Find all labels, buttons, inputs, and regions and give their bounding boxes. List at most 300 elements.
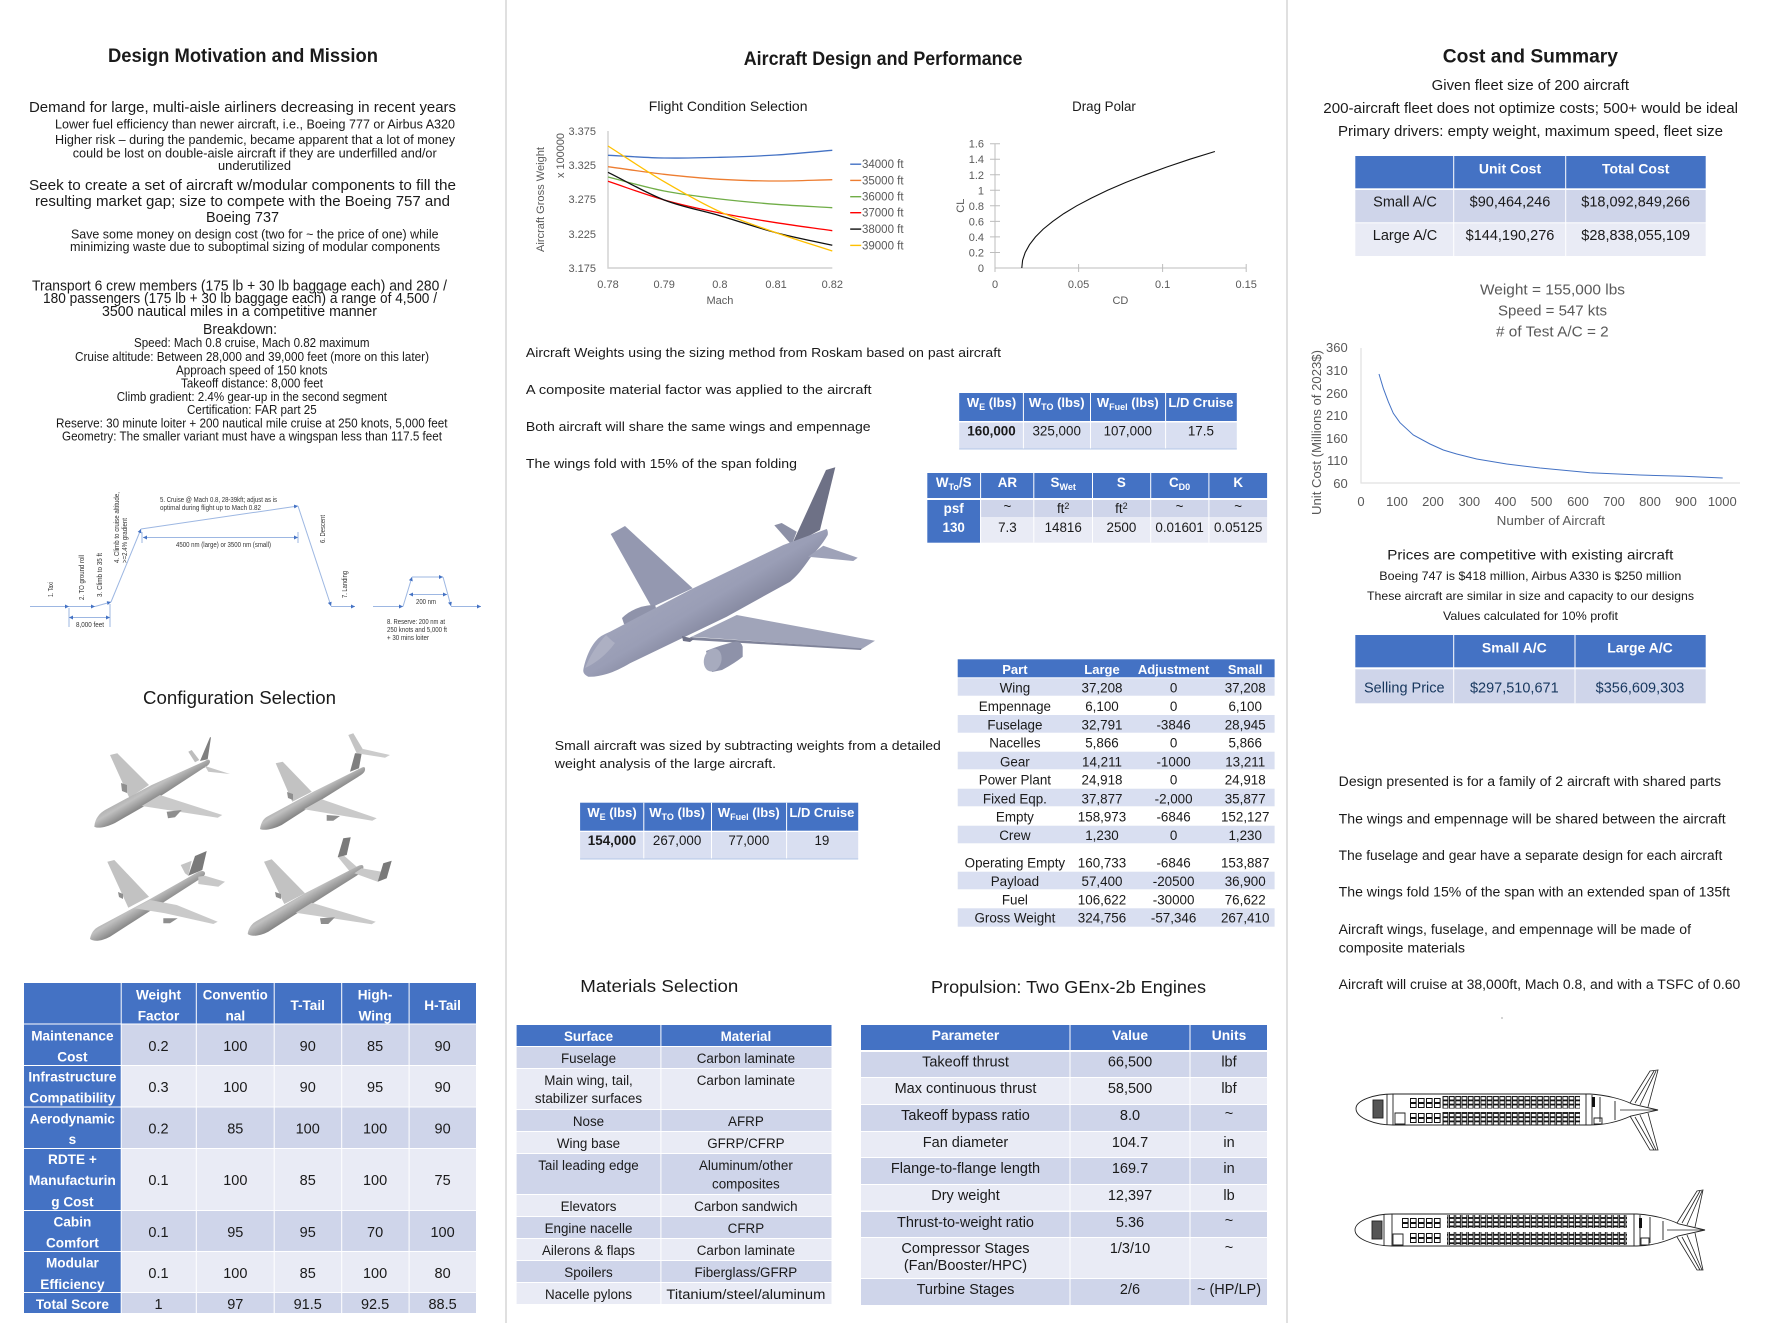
icon: large aircraft 3d model [583,467,875,677]
table: selling price: Selling Price [1364,680,1445,696]
table: unit and total cost: Small A/C [1373,195,1437,211]
chart: drag polar: 1.2 [969,170,984,182]
chart: mission profile diagram: 7. Landing [340,571,349,598]
table: engine parameters: 2/6 [1120,1282,1140,1298]
table: materials by surface: Engine nacelle [545,1221,632,1236]
text block: design summary: The wings fold 15% of the span with an extended span of 135ft [1339,885,1730,900]
weight rows: -30000 [1153,892,1194,907]
chart: mission profile diagram: optimal during flight up to Mach 0.82 [160,503,261,512]
table: materials by surface: Ailerons & flaps [542,1243,635,1258]
score values: 0.1 [148,1225,169,1241]
icon: t-tail aircraft render [260,733,390,830]
text block: sizing method notes: Aircraft Weights using the sizing method from Roskam based on past aircraft [526,345,1001,360]
table: engine parameters [861,1025,1267,1305]
chart: mission profile diagram: 1. Taxi [46,582,55,597]
weight rows: Fuel [1002,892,1028,907]
table: small aircraft weights [580,803,858,859]
weight rows: 76,622 [1225,892,1266,907]
score values: 100 [363,1173,387,1189]
chart: mission profile diagram: 2. TO ground roll [77,555,86,600]
score values: 91.5 [294,1297,322,1313]
text block: price comparison: Values calculated for 10% profit [1443,609,1619,623]
table: large aircraft weights: 107,000 [1104,424,1152,438]
score values: 92.5 [361,1297,389,1313]
chart: flight condition selection: 0.8 [712,279,728,291]
chart: unit cost vs number of aircraft: 900 [1675,494,1697,509]
table: unit and total cost: Large A/C [1373,228,1437,244]
header row: High- [358,987,392,1002]
text block: modular aircraft goal: Boeing 737 [206,209,279,226]
chart: unit cost vs number of aircraft: 500 [1531,494,1552,509]
score values: 0.1 [148,1173,169,1189]
row labels: Efficiency [40,1277,105,1292]
row labels: Total Score [36,1297,109,1312]
text block: mission requirements: 3500 nautical miles in a competitive manner [102,303,377,320]
text block: fleet assumptions: Primary drivers: empty weight, maximum speed, fleet size [1338,124,1723,140]
weight rows: 1,230 [1228,828,1262,843]
table: wing and drag parameters: 7.3 [998,520,1017,535]
text block: mission requirements: Reserve: 30 minute loiter + 200 nautical mile cruise at 250 knots, 5,000 feet [56,416,448,431]
text block: sizing method notes: The wings fold with 15% of the span folding [526,456,797,471]
heading: propulsion: Propulsion: Two GEnx-2b Engines [931,977,1206,997]
text block: price comparison [1367,546,1694,623]
score values: 90 [435,1039,451,1055]
table: materials by surface: Elevators [561,1199,617,1214]
weight rows: 35,877 [1225,791,1266,806]
panel: materials selection [517,976,832,1304]
row labels: RDTE + [48,1152,97,1167]
table: wing and drag parameters: 130 [943,520,965,535]
heading: materials selection: Materials Selection [580,976,738,996]
chart: unit cost vs number of aircraft: Unit Cost (Millions of 2023$) [1309,350,1324,515]
weight rows: 14,211 [1082,754,1122,769]
table: engine parameters: Parameter [932,1028,1000,1043]
weight rows: 36,900 [1225,874,1266,889]
icon: h-tail aircraft render [248,837,392,936]
table: materials by surface: Nose [573,1114,604,1129]
row labels: g Cost [51,1195,94,1210]
weight rows: Empty [996,810,1034,825]
header row: Factor [138,1009,180,1024]
table: wing and drag parameters: ~ [1003,499,1011,514]
header row: nal [225,1009,245,1024]
table: wing and drag parameters: AR [998,475,1017,490]
weight rows: Operating Empty [965,856,1065,871]
text block: modular aircraft goal [29,177,456,254]
weight rows: 13,211 [1225,754,1265,769]
header row: H-Tail [424,998,461,1013]
text block: price comparison: Prices are competitive with existing aircraft [1387,546,1673,562]
chart: unit cost vs number of aircraft: 800 [1639,494,1661,509]
chart: mission profile diagram: 6. Descent [318,515,327,543]
text block: mission requirements: Approach speed of 150 knots [176,363,328,378]
chart: drag polar: 0.05 [1068,279,1089,291]
table: large aircraft weights: Fuel [1109,402,1128,412]
chart: mission profile diagram: 8. Reserve: 200 nm at [387,617,445,626]
header row: Weight [136,987,181,1002]
table: materials by surface: Carbon laminate [697,1073,795,1088]
weight rows: -20500 [1153,874,1194,889]
score values: 75 [435,1173,451,1189]
text block: mission requirements: 180 passengers (175 lb + 30 lb baggage each) a range of 4,500 / [43,290,438,307]
chart: drag polar: 1.6 [969,139,984,151]
table: wing and drag parameters: ft [1057,501,1064,516]
weight rows: 57,400 [1082,874,1122,889]
weight rows: -1000 [1156,754,1191,769]
chart: unit cost vs number of aircraft [1309,282,1740,528]
header row: Large [1084,662,1120,677]
table: materials by surface: CFRP [728,1221,764,1236]
table: engine parameters: Max continuous thrust [895,1081,1036,1097]
table: small aircraft weights: (lbs) [674,805,705,820]
table: large aircraft weights: (lbs) [1053,395,1085,410]
text block: mission requirements: Transport 6 crew members (175 lb + 30 lb baggage each) and 280 / [32,278,448,295]
text block: modular aircraft goal: resulting market gap; size to compete with the Boeing 757 and [35,193,450,210]
weight rows: Nacelles [989,736,1041,751]
table: small aircraft weights: 267,000 [653,833,701,848]
table: materials by surface: Surface [564,1029,613,1044]
weight rows: 106,622 [1078,892,1126,907]
chart: unit cost vs number of aircraft: Number of Aircraft [1497,513,1605,528]
weight rows: Gear [1000,754,1030,769]
score values: 1 [154,1297,163,1313]
chart: drag polar [955,98,1257,307]
table: engine parameters: Takeoff bypass ratio [901,1108,1030,1124]
chart legend: 39000 ft [862,240,904,252]
table: engine parameters: ~ [1225,1240,1233,1256]
text block: price comparison: These aircraft are similar in size and capacity to our designs [1367,589,1694,603]
score values: 85 [300,1173,316,1189]
chart: unit cost vs number of aircraft: 0 [1357,494,1365,509]
weight rows [965,681,1269,926]
chart: mission profile diagram: 3. Climb to 35 ft [95,553,104,597]
text block: mission requirements: Takeoff distance: 8,000 feet [181,376,323,391]
row labels: Cabin [54,1215,91,1230]
row labels: Compatibility [29,1091,116,1106]
chart: flight condition selection: 3.275 [568,194,596,206]
chart: mission profile diagram: >=2.4% gradient [120,518,129,563]
table: large aircraft weights: (lbs) [985,395,1016,410]
text block: design summary: Aircraft wings, fuselage, and empennage will be made of [1339,922,1691,937]
weight rows: 0 [1170,773,1177,788]
header row: Adjustment [1138,662,1210,677]
text block: small aircraft sizing note: Small aircraft was sized by subtracting weights from a detailed [555,738,941,753]
text block: market demand: could be lost on double-aisle aircraft if they are underfilled and/or [73,146,437,160]
table: materials by surface: Tail leading edge [538,1158,639,1173]
chart: unit cost vs number of aircraft: Speed = 547 kts [1498,304,1607,320]
table: engine parameters: 104.7 [1112,1135,1148,1151]
chart: drag polar: CD [1112,295,1128,307]
weight rows: -2,000 [1155,791,1193,806]
table: engine parameters: 5.36 [1116,1215,1144,1231]
text block: sizing method notes: Both aircraft will share the same wings and empennage [526,419,871,434]
text block: fleet assumptions: 200-aircraft fleet does not optimize costs; 500+ would be ideal [1323,101,1738,117]
table: materials by surface: Main wing, tail, [544,1073,633,1088]
chart: flight condition selection: 0.82 [822,279,843,291]
chart: mission profile diagram: 4. Climb to cruise altitude, [112,492,121,563]
table: materials by surface: Aluminum/other [699,1158,793,1173]
score values: 80 [435,1266,451,1282]
text block: fleet assumptions [1323,78,1738,140]
table: unit and total cost: $18,092,849,266 [1581,195,1690,211]
chart: drag polar: Drag Polar [1072,98,1136,114]
table: wing and drag parameters: S [1117,475,1126,490]
table: materials by surface: GFRP/CFRP [707,1136,785,1151]
weight rows: -6846 [1156,810,1191,825]
weight rows: Power Plant [979,773,1051,788]
table: wing and drag parameters: Wet [1059,482,1076,492]
text block: modular aircraft goal: minimizing waste due to suboptimal sizing of modular components [70,239,440,254]
table: engine parameters: in [1223,1135,1235,1151]
table: materials by surface: Carbon sandwich [694,1199,798,1214]
table: large aircraft weights: (lbs) [1128,395,1159,410]
text block: design summary: composite materials [1339,940,1465,955]
row labels: Manufacturin [29,1173,116,1188]
weight rows: 6,100 [1228,699,1262,714]
chart: unit cost vs number of aircraft: 700 [1603,494,1625,509]
table: engine parameters: Flange-to-flange length [891,1161,1040,1177]
weight rows: Gross Weight [974,911,1056,926]
table: large aircraft weights: 17.5 [1188,424,1214,438]
weight rows: 153,887 [1221,856,1269,871]
header row: Wing [359,1009,392,1024]
score values: 100 [223,1039,247,1055]
table: wing and drag parameters: 2 [1123,501,1128,511]
text block: small aircraft sizing note [554,738,941,771]
score values: 88.5 [428,1297,457,1313]
chart legend: 34000 ft [862,159,904,171]
table: wing and drag parameters: ~ [1176,499,1184,514]
row labels: Comfort [46,1236,99,1251]
weight rows: 32,791 [1082,717,1122,732]
table: engine parameters: lbf [1221,1055,1238,1071]
text block: modular aircraft goal: Seek to create a set of aircraft w/modular components to fill the [29,177,456,194]
table: engine parameters: Compressor Stages [901,1241,1030,1257]
table: engine parameters: 169.7 [1112,1161,1148,1177]
table: wing and drag parameters: 0.01601 [1155,520,1204,535]
chart: drag polar: 0.15 [1235,279,1257,291]
weight rows: 24,918 [1082,773,1122,788]
weight rows: 324,756 [1078,911,1126,926]
chart: mission profile diagram: 5. Cruise @ Mach 0.8, 28-39kft; adjust as is [160,495,277,504]
score values: 90 [300,1080,316,1096]
score values: 100 [223,1173,247,1189]
score values: 90 [435,1080,451,1096]
table: wing and drag parameters: ~ [1234,499,1242,514]
table: engine parameters: 8.0 [1120,1108,1140,1124]
chart: unit cost vs number of aircraft: 110 [1327,453,1348,468]
table: small aircraft weights: (lbs) [606,805,637,820]
icon: conventional aircraft render [94,737,230,828]
table: wing and drag parameters: D0 [1179,482,1190,492]
chart: flight condition selection [535,98,904,307]
chart: drag polar: 0.4 [969,232,984,244]
table: materials by surface: stabilizer surfaces [535,1091,642,1106]
text block: price comparison: Boeing 747 is $418 million, Airbus A330 is $250 million [1379,569,1681,583]
text block: market demand [29,99,456,173]
heading: cost and summary: Cost and Summary [1443,46,1618,68]
table: large aircraft weights [959,393,1237,449]
panel: propulsion [861,977,1267,1305]
text block: design summary: Aircraft will cruise at 38,000ft, Mach 0.8, and with a TSFC of 0.60 [1339,977,1740,992]
chart: flight condition selection: Flight Condition Selection [649,98,808,114]
table: materials by surface: Fiberglass/GFRP [695,1265,797,1280]
score values: 90 [435,1121,451,1137]
header row: Small [1228,662,1263,677]
weight rows: 1,230 [1085,828,1119,843]
chart: unit cost vs number of aircraft: 100 [1386,494,1408,509]
weight rows: 0 [1170,681,1177,696]
chart: mission profile diagram: 250 knots and 5,000 ft [387,625,447,634]
icon: high-wing aircraft render [90,851,225,941]
table: engine parameters: Value [1112,1028,1148,1043]
score values: 95 [227,1225,243,1241]
weight rows: Payload [991,874,1039,889]
score values: 90 [300,1039,316,1055]
chart: flight condition selection: 3.375 [568,126,596,138]
score values: 97 [227,1297,243,1313]
row labels [28,1029,117,1312]
score values: 100 [430,1225,455,1241]
table: wing and drag parameters: To [949,482,959,492]
table: selling price: Small A/C [1482,639,1547,655]
text block: mission requirements: Speed: Mach 0.8 cruise, Mach 0.82 maximum [134,335,370,350]
heading: aircraft design and performance: Aircraft Design and Performance [744,48,1023,70]
heading: design motivation and mission: Design Motivation and Mission [108,45,378,67]
table: materials by surface: Fuselage [561,1051,616,1066]
chart legend: 35000 ft [862,175,904,187]
table: unit and total cost: Total Cost [1602,160,1670,176]
weight rows: 37,208 [1082,681,1122,696]
text block: mission requirements [32,278,448,444]
table: wing and drag parameters: ft [1115,501,1123,516]
table: large aircraft weights: 325,000 [1032,424,1081,438]
chart: unit cost vs number of aircraft: 310 [1326,363,1348,378]
text block: design summary: The wings and empennage will be shared between the aircraft [1339,811,1726,826]
table: small aircraft weights: 154,000 [588,833,636,848]
text block: design summary: Design presented is for a family of 2 aircraft with shared parts [1339,774,1721,789]
table: small aircraft weights: W [649,805,662,820]
weight rows: 267,410 [1221,911,1269,926]
table: wing and drag parameters: 2 [1064,501,1069,511]
table: materials by surface: composites [712,1176,780,1192]
table: engine parameters: Units [1212,1028,1247,1043]
table: materials by surface: Titanium/steel/aluminum [666,1287,825,1302]
score values: 100 [363,1266,387,1282]
score values [148,1039,457,1313]
table: materials by surface: Wing base [557,1136,620,1151]
text block: sizing method notes [526,345,1001,471]
panel: design motivation and mission [29,45,481,642]
weight rows: 5,866 [1228,736,1262,751]
table: small aircraft weights: E [600,812,606,822]
weight rows: 5,866 [1085,736,1119,751]
table: large aircraft weights: E [979,402,985,412]
table: engine parameters: lbf [1221,1081,1238,1097]
table: unit and total cost: Unit Cost [1479,160,1541,176]
row labels: Infrastructure [28,1070,117,1085]
chart: drag polar: 0.2 [969,248,984,260]
chart: unit cost vs number of aircraft: 360 [1326,340,1348,355]
chart: unit cost vs number of aircraft: 60 [1333,476,1348,491]
chart: drag polar: 0.6 [969,216,984,228]
table: unit and total cost: $28,838,055,109 [1581,228,1690,244]
table: engine parameters: Turbine Stages [917,1282,1014,1298]
chart: mission profile diagram: 4500 nm (large) or 3500 nm (small) [176,540,271,549]
chart legend: 36000 ft [862,192,904,204]
table: wing and drag parameters: 0.05125 [1214,520,1262,535]
score values: 95 [367,1080,383,1096]
weight rows: -6846 [1156,856,1191,871]
text block: market demand: Lower fuel efficiency than newer aircraft, i.e., Boeing 777 or Airbus A320 [55,117,455,132]
chart: flight condition selection: 3.225 [568,229,596,241]
header row [1002,662,1263,677]
chart: unit cost vs number of aircraft: 260 [1326,386,1348,401]
score values: 85 [367,1039,383,1055]
chart legend: 38000 ft [862,224,904,236]
table: large aircraft weights: 160,000 [967,424,1016,438]
table: engine parameters: 1/3/10 [1110,1241,1150,1257]
chart: flight condition selection: 3.325 [568,160,596,172]
table: materials by surface: Carbon laminate [697,1243,795,1258]
score values: 100 [223,1266,247,1282]
row labels: Modular [46,1256,100,1271]
table: materials by surface: Carbon laminate [697,1051,795,1066]
score values: 100 [363,1121,387,1137]
weight rows: Fixed Eqp. [983,791,1047,806]
chart: flight condition selection: 0.81 [765,279,787,291]
table: materials by surface: Spoilers [564,1265,613,1280]
table: large aircraft weights: W [967,395,979,410]
table: engine parameters: Takeoff thrust [922,1055,1009,1071]
table: small aircraft weights: Fuel [730,812,749,822]
table: selling price: $297,510,671 [1470,680,1559,696]
header row: Conventio [203,987,268,1002]
chart: flight condition selection: 0.79 [653,279,675,291]
chart: mission profile diagram: 8,000 feet [76,620,104,629]
weight rows: -3846 [1156,717,1191,732]
score values: 0.3 [148,1080,169,1096]
table: small aircraft weights: W [587,805,600,820]
table: small aircraft weights: 19 [814,833,829,848]
table: engine parameters: 58,500 [1108,1081,1152,1097]
score values: 100 [296,1121,320,1137]
weight rows: 28,945 [1225,717,1266,732]
text block: small aircraft sizing note: weight analysis of the large aircraft. [554,756,776,771]
score values: 85 [227,1121,243,1137]
chart: flight condition selection: x 100000 [555,133,567,178]
weight rows: 6,100 [1085,699,1119,714]
text block: market demand: Higher risk – during the pandemic, became apparent that a lot of money [55,132,456,147]
header row: Part [1002,662,1028,677]
chart: unit cost vs number of aircraft: 160 [1326,431,1348,446]
table: large aircraft weights: TO [1041,402,1053,412]
table: wing and drag parameters: /S [959,475,972,490]
chart legend [850,159,904,252]
table: detailed weight breakdown [958,659,1275,927]
table: small aircraft weights: TO [662,812,674,822]
table: large aircraft weights: W [1029,395,1041,410]
panel: aircraft design and performance [526,48,1275,927]
table: large aircraft weights: W [1097,395,1109,410]
table: wing and drag parameters [927,473,1267,543]
panel: cost and summary [1309,46,1740,1270]
table: engine parameters: Fan diameter [923,1135,1008,1151]
weight rows: -57,346 [1151,911,1196,926]
header row [136,987,461,1024]
text block: mission requirements: Climb gradient: 2.4% gear-up in the second segment [117,389,387,404]
table: engine parameters: 66,500 [1108,1055,1152,1071]
